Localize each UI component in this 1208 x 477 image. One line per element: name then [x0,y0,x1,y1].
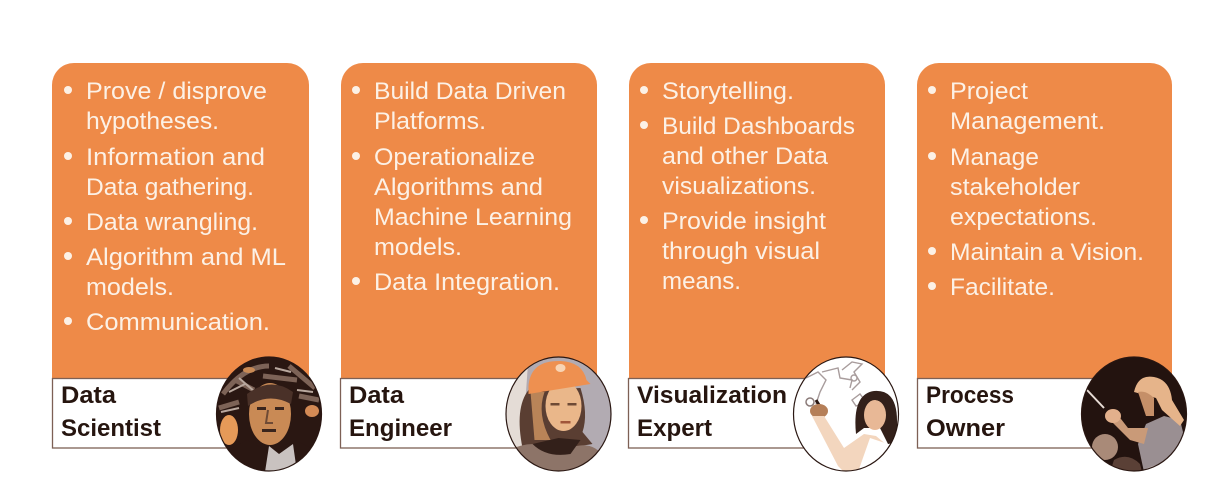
bullet list: Visualization Expert duties [640,78,855,295]
bullet list: Data Scientist duties: Communication. [86,309,270,336]
role label box: Visualization Expert: Expert [637,415,712,442]
bullet list: Data Scientist duties: Data gathering. [86,174,254,201]
bullet list: Data Engineer duties: Machine Learning [374,204,572,231]
role label box: Data Engineer: Data [349,382,405,409]
panel: Process Owner [917,63,1188,472]
bullet list: Visualization Expert duties: visualizations. [662,173,816,200]
panel: Data Scientist [52,63,323,472]
role label box: Visualization Expert [628,378,886,448]
bullet list: Process Owner duties: Maintain a Vision. [950,239,1144,266]
bullet list: Data Engineer duties: Operationalize [374,144,535,171]
role label box: Data Engineer: Engineer [349,415,452,442]
role label box: Data Scientist: Scientist [61,415,161,442]
bullet list: Process Owner duties: expectations. [950,204,1097,231]
bullet list: Data Scientist duties: Prove / disprove [86,78,267,105]
orange card: Data Scientist [52,63,309,378]
bullet list: Visualization Expert duties: Build Dashboards [662,113,855,140]
portrait: woman conducting with baton [1080,356,1188,472]
bullet list: Data Engineer duties: models. [374,234,462,261]
bullet list: Visualization Expert duties: Storytelling. [662,78,794,105]
bullet list: Data Engineer duties: Platforms. [374,108,486,135]
bullet list: Data Engineer duties: Data Integration. [374,269,560,296]
bullet list: Data Scientist duties [64,78,286,336]
portrait: woman drawing a world map [792,356,900,472]
bullet list: Visualization Expert duties: and other Data [662,143,829,170]
bullet list: Visualization Expert duties: through visual [662,238,820,265]
role label box: Process Owner [918,378,1172,448]
bullet list: Data Engineer duties [352,78,572,296]
panel: Data Engineer [340,63,612,472]
role label box: Process Owner: Owner [926,415,1005,442]
orange card: Process Owner [917,63,1172,378]
bullet list: Visualization Expert duties: means. [662,268,741,295]
portrait: woman in hard hat [504,356,612,472]
bullet list: Process Owner duties: stakeholder [950,174,1080,201]
portrait: man among machinery [215,356,323,472]
bullet list: Process Owner duties: Management. [950,108,1105,135]
bullet list: Visualization Expert duties: Provide insight [662,208,826,235]
bullet list: Data Scientist duties: Data wrangling. [86,209,258,236]
role label box: Data Engineer [340,378,598,448]
orange card: Data Engineer [341,63,597,378]
bullet list: Data Scientist duties: Information and [86,144,265,171]
bullet list: Process Owner duties: Project [950,78,1028,105]
panel: Visualization Expert [628,63,900,472]
bullet list: Process Owner duties: Facilitate. [950,274,1055,301]
role label box: Data Scientist: Data [61,382,117,409]
bullet list: Data Engineer duties: Algorithms and [374,174,543,201]
bullet list: Data Engineer duties: Build Data Driven [374,78,566,105]
bullet list: Data Scientist duties: models. [86,274,174,301]
role label box: Visualization Expert: Visualization [637,382,787,409]
bullet list: Process Owner duties: Manage [950,144,1039,171]
role label box: Process Owner: Process [926,382,1014,409]
orange card: Visualization Expert [629,63,885,378]
bullet list: Data Scientist duties: hypotheses. [86,108,219,135]
bullet list: Process Owner duties [928,78,1144,301]
bullet list: Data Scientist duties: Algorithm and ML [86,244,286,271]
role label box: Data Scientist [52,378,308,448]
